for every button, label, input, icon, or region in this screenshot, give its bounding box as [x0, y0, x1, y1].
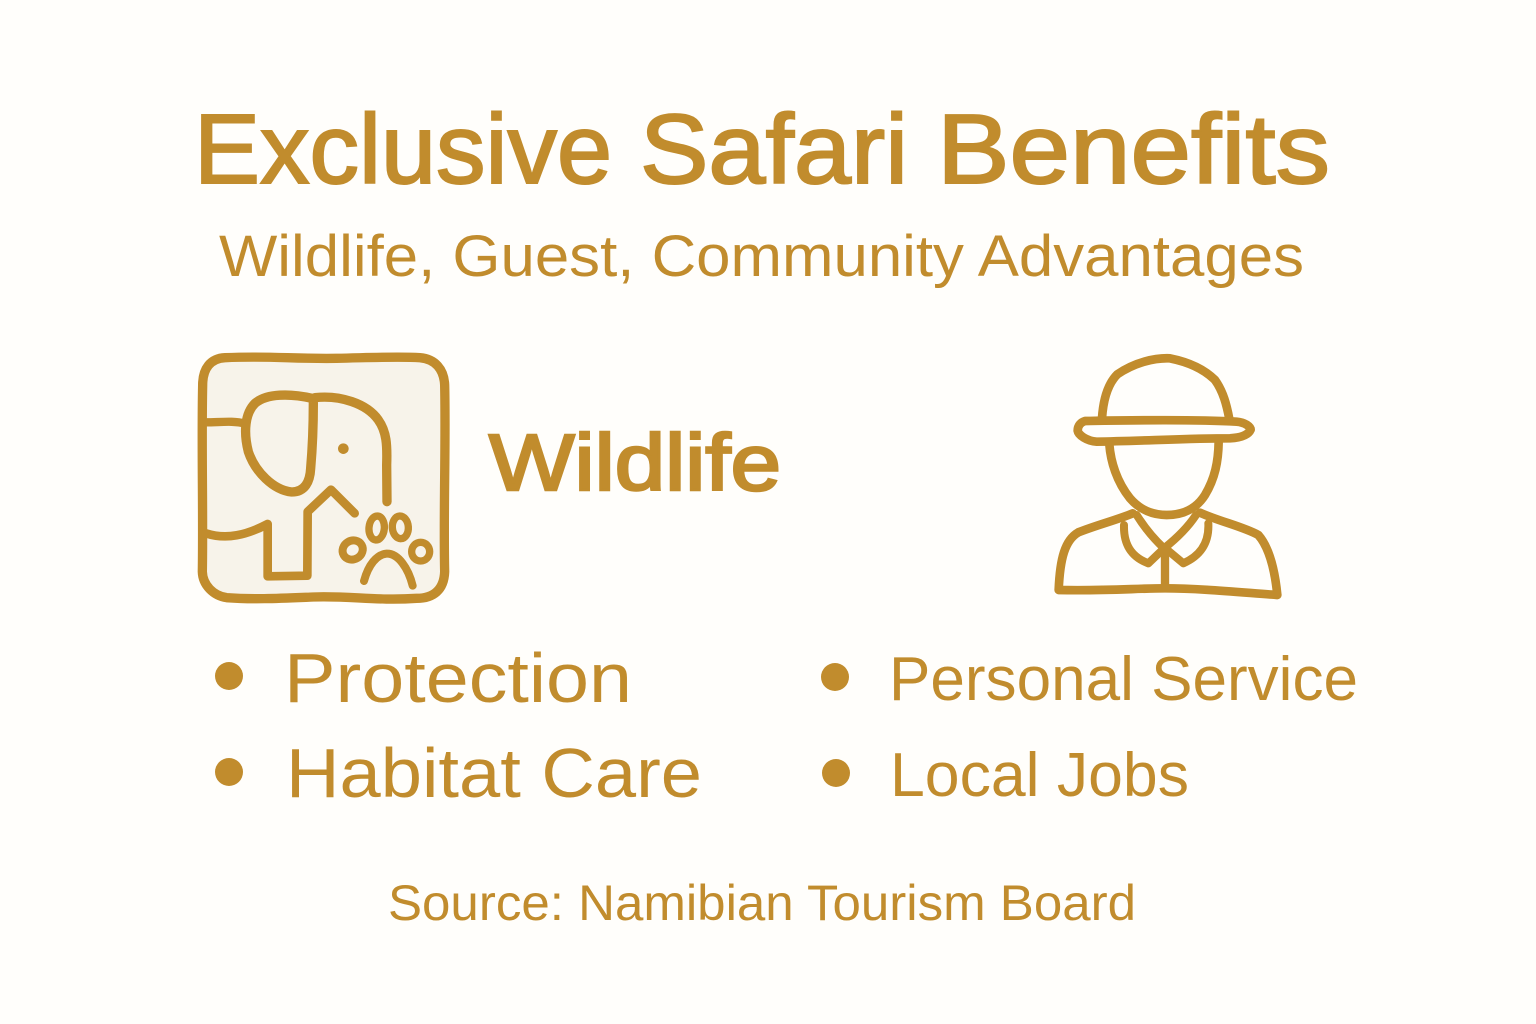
icon: safari guide — [1059, 358, 1277, 595]
title: Benefits — [937, 94, 1330, 204]
hat brim — [1078, 420, 1251, 442]
guide shoulders and body — [1059, 513, 1277, 595]
bullet — [215, 662, 243, 690]
list item: Habitat Care: Habitat Care — [286, 734, 702, 812]
shirt placket — [1152, 548, 1177, 588]
list item: Personal Service: Personal Service — [889, 645, 1358, 714]
bullet — [821, 663, 849, 691]
shirt collar — [1124, 515, 1208, 563]
list item: Protection: Protection — [284, 639, 632, 717]
icon frame — [202, 357, 445, 599]
paw toe: inner left — [368, 515, 385, 541]
bullet list: guest and community — [821, 645, 1358, 810]
list item: Local Jobs: Local Jobs — [890, 741, 1189, 810]
hat crown — [1102, 358, 1229, 419]
elephant ear — [246, 395, 313, 492]
paw toe: outer right — [412, 542, 430, 561]
bullet list: wildlife — [215, 639, 702, 812]
title — [194, 94, 1330, 204]
subtitle: Wildlife, Guest, Community Advantages — [219, 224, 1304, 289]
source note: Source: Namibian Tourism Board — [388, 875, 1136, 931]
paw pad — [364, 554, 413, 586]
paw toe: inner right — [392, 515, 409, 539]
elephant back line — [206, 422, 245, 424]
paw toe: outer left — [339, 537, 366, 563]
bullet — [215, 758, 243, 786]
guide face — [1109, 442, 1219, 515]
icon: elephant and paw print — [202, 357, 445, 599]
elephant head and trunk top — [315, 397, 387, 502]
section heading: Wildlife: Wildlife — [489, 418, 781, 507]
elephant belly and leg — [206, 490, 355, 576]
bullet — [822, 759, 850, 787]
elephant eye — [338, 443, 349, 454]
title: Exclusive — [194, 94, 612, 204]
title: Safari — [640, 94, 908, 204]
